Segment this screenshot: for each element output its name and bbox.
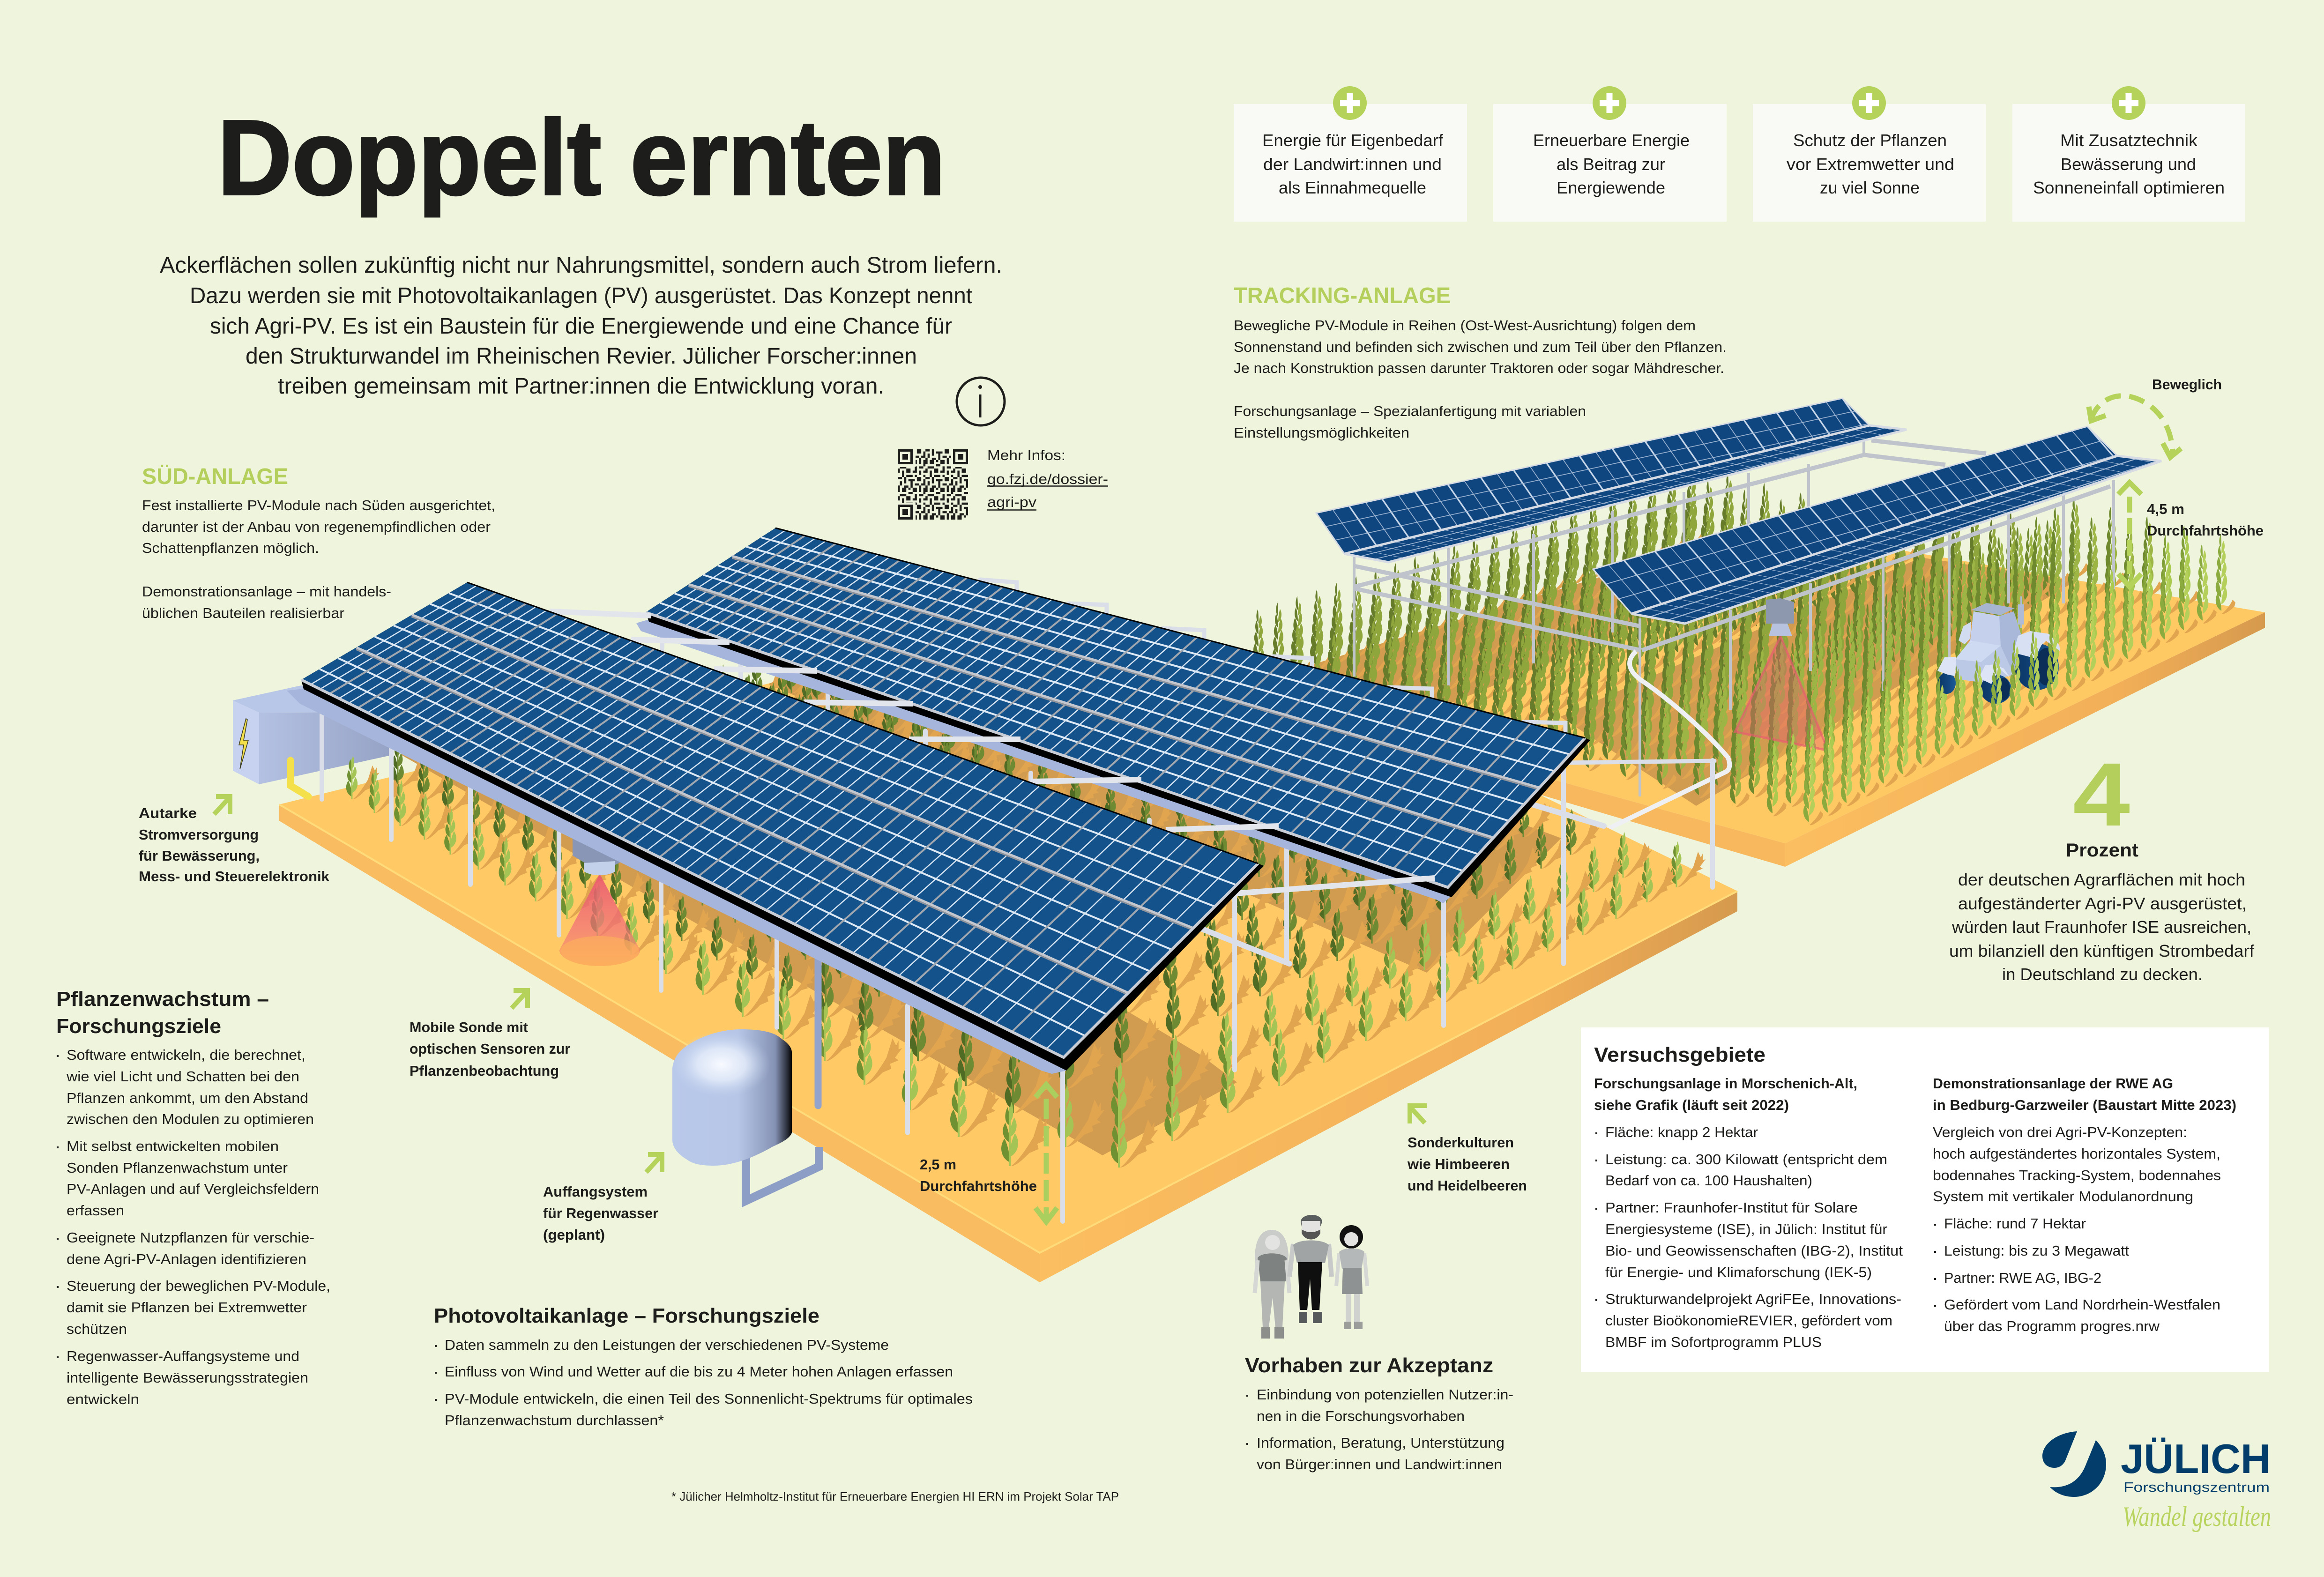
arrow: mobile probe pointer: [512, 990, 528, 1008]
footnote: * Jülicher Helmholtz-Institut für Erneuerbare Energien HI ERN im Projekt Solar TAP: [671, 1489, 1119, 1503]
logo: Forschungszentrum Jülich: Forschungszentrum: [2123, 1480, 2270, 1495]
plants: tracking second row: [1767, 525, 2199, 816]
text block: Photovoltaik research goals: Daten sammeln zu den Leistungen der verschiedenen PV-Systeme: [445, 1337, 889, 1353]
illustration: south system: [233, 466, 1737, 1282]
sensor: mobile probe with beam: [559, 836, 640, 966]
frame: tracking row 2 supports: [1640, 480, 2114, 796]
text block: Pflanzenwachstum research goals: damit sie Pflanzen bei Extremwetter: [67, 1299, 307, 1316]
label: 2,5 m clearance: Durchfahrtshöhe: [920, 1178, 1037, 1194]
text: Tracking-Anlage description: Einstellungsmöglichkeiten: [1234, 424, 1409, 441]
text: more info link: agri-pv: [987, 494, 1037, 510]
tank: rainwater storage: [672, 1029, 792, 1166]
label: Sonderkulturen: Sonderkulturen: [1408, 1134, 1514, 1151]
logo: Forschungszentrum Jülich: [2042, 1431, 2271, 1532]
panel: Versuchsgebiete: bodennahes Tracking-System, bodennahes: [1933, 1167, 2221, 1183]
arrow: autarkic supply pointer: [214, 796, 230, 814]
text block: Photovoltaik research goals: Pflanzenwachstum durchlassen*: [445, 1412, 664, 1428]
text: more info link: go.fzj.de/dossier-: [987, 471, 1108, 487]
panel: Versuchsgebiete: [1581, 1027, 2269, 1372]
arrow: movable panel rotation: [2089, 396, 2181, 457]
label: Autarke Stromversorgung: für Bewässerung,: [139, 848, 260, 864]
stat: 4 percent: der deutschen Agrarflächen mit hoch: [1958, 870, 2245, 889]
text block: Pflanzenwachstum research goals: Geeignete Nutzpflanzen für verschie-: [67, 1229, 314, 1246]
panel: benefit card plant protection: Schutz der Pflanzen: [1793, 131, 1947, 150]
text: Süd-Anlage description: üblichen Bauteilen realisierbar: [142, 605, 344, 621]
text block: Pflanzenwachstum research goals: entwickeln: [67, 1391, 139, 1407]
plate: south ground: [279, 609, 1737, 1282]
panel: Versuchsgebiete: Partner: RWE AG, IBG-2: [1944, 1270, 2101, 1286]
icon: QR code: [897, 448, 969, 521]
arrow: 2.5 m clearance: [1035, 1085, 1057, 1222]
stat: 4 percent: um bilanziell den künftigen Strombedarf: [1949, 941, 2255, 960]
panel: benefit card energy needs: [1234, 86, 1467, 222]
text block: Pflanzenwachstum research goals: Sonden Pflanzenwachstum unter: [67, 1160, 288, 1176]
panel: Versuchsgebiete: Demonstrationsanlage der RWE AG: [1933, 1075, 2173, 1092]
plants: tracking front row: [1803, 534, 2235, 825]
label: Auffangsystem: [543, 1183, 658, 1243]
text: more info link: [987, 447, 1108, 510]
plate: tracking ground: [1228, 527, 2265, 867]
text block: Vorhaben zur Akzeptanz: von Bürger:innen und Landwirt:innen: [1257, 1456, 1502, 1473]
panel: Versuchsgebiete: über das Programm progres.nrw: [1944, 1318, 2160, 1334]
label: Mobile Sonde: Pflanzenbeobachtung: [410, 1063, 559, 1079]
panel: benefit card energy needs: als Einnahmequelle: [1279, 178, 1426, 197]
panel: benefit card renewable energy: [1493, 86, 1727, 222]
text: more info link: Mehr Infos:: [987, 447, 1065, 463]
text block: Pflanzenwachstum research goals: wie viel Licht und Schatten bei den: [66, 1068, 299, 1085]
label: Mobile Sonde: optischen Sensoren zur: [410, 1041, 570, 1057]
text block: Vorhaben zur Akzeptanz: Einbindung von potenziellen Nutzer:in-: [1257, 1386, 1513, 1403]
arrow: 4.5 m clearance: [2118, 483, 2141, 587]
panel: Versuchsgebiete: Vergleich von drei Agri-PV-Konzepten:: [1933, 1124, 2187, 1140]
panel: Versuchsgebiete: cluster BioökonomieREVIER, gefördert vom: [1605, 1312, 1892, 1329]
panel: benefit card extra technology: Bewässerung und: [2061, 155, 2196, 174]
text: Tracking-Anlage description: [1234, 317, 1727, 441]
text block: Photovoltaik research goals: [434, 1304, 973, 1428]
panel: tracking row 1 modules: [1316, 398, 1907, 562]
stat: 4 percent: Prozent: [2066, 840, 2138, 861]
panel: benefit card renewable energy: als Beitrag zur: [1557, 155, 1665, 174]
text block: Pflanzenwachstum research goals: Software entwickeln, die berechnet,: [67, 1047, 305, 1063]
intro text: den Strukturwandel im Rheinischen Revier. Jülicher Forscher:innen: [246, 344, 917, 369]
arrow: special crops pointer: [1410, 1106, 1427, 1123]
panel: benefit card extra technology: Mit Zusatztechnik: [2060, 131, 2198, 150]
text block: Pflanzenwachstum research goals: intelligente Bewässerungsstrategien: [67, 1369, 308, 1386]
text block: Pflanzenwachstum research goals: Forschungsziele: [56, 1015, 221, 1038]
heading: Süd-Anlage: SÜD-ANLAGE: [142, 464, 288, 489]
label: 2,5 m clearance: 2,5 m: [920, 1156, 956, 1173]
text block: Pflanzenwachstum research goals: Pflanzenwachstum –: [56, 988, 269, 1011]
text: Süd-Anlage description: [142, 497, 495, 621]
stat: 4 percent: 4: [2073, 744, 2130, 845]
text: Tracking-Anlage description: Je nach Konstruktion passen darunter Traktoren oder sogar Mähdrescher.: [1234, 360, 1724, 376]
cable: tracking power line: [1065, 651, 1729, 1064]
panel: benefit card extra technology: [2012, 86, 2245, 222]
panel: Versuchsgebiete: Gefördert vom Land Nordrhein-Westfalen: [1944, 1296, 2220, 1313]
stat: 4 percent: [1949, 744, 2255, 984]
plants: tracking middle rows: [1620, 498, 2162, 807]
text block: Pflanzenwachstum research goals: PV-Anlagen und auf Vergleichsfeldern: [67, 1181, 319, 1197]
panel: Versuchsgebiete: Energiesysteme (ISE), in Jülich: Institut für: [1605, 1221, 1887, 1237]
label: Auffangsystem: für Regenwasser: [543, 1205, 658, 1221]
box: autonomous power supply: [233, 685, 389, 796]
label: Autarke Stromversorgung: Mess- und Steuerelektronik: [139, 868, 330, 885]
plants: south crop lattice: [392, 466, 1600, 1136]
panel: benefit card energy needs: Energie für Eigenbedarf: [1262, 131, 1444, 150]
text block: Pflanzenwachstum research goals: dene Agri-PV-Anlagen identifizieren: [67, 1251, 306, 1267]
text block: Photovoltaik research goals: PV-Module entwickeln, die einen Teil des Sonnenlicht-Spektrums für optimales: [445, 1391, 973, 1407]
sensor: tracking probe: [1766, 598, 1794, 636]
label: Auffangsystem: Auffangsystem: [543, 1183, 648, 1200]
struts: panel connectors: [550, 611, 1435, 893]
label: Sonderkulturen: und Heidelbeeren: [1408, 1177, 1527, 1194]
panel: benefit card extra technology: Sonneneinfall optimieren: [2033, 178, 2225, 197]
illustration: tracking system: [1065, 398, 2265, 1064]
intro text: [160, 253, 1002, 399]
panel: benefit card renewable energy: Erneuerbare Energie: [1533, 131, 1690, 150]
heading: Tracking-Anlage: TRACKING-ANLAGE: [1234, 283, 1451, 308]
text block: Photovoltaik research goals: Photovoltaikanlage – Forschungsziele: [434, 1304, 819, 1327]
panel: Versuchsgebiete: Fläche: knapp 2 Hektar: [1605, 1124, 1758, 1140]
panel: Versuchsgebiete: System mit vertikaler Modulanordnung: [1933, 1188, 2193, 1205]
text block: Photovoltaik research goals: Einfluss von Wind und Wetter auf die bis zu 4 Meter hohen Anlagen erfassen: [445, 1363, 953, 1380]
stat: 4 percent: aufgeständerter Agri-PV ausgerüstet,: [1958, 894, 2247, 913]
intro text: treiben gemeinsam mit Partner:innen die Entwicklung voran.: [278, 374, 884, 399]
intro text: sich Agri-PV. Es ist ein Baustein für die Energiewende und eine Chance für: [210, 314, 952, 339]
plants: south front rows: [346, 756, 1706, 1168]
pipes: rainwater drain: [746, 1147, 819, 1201]
panel: rear solar modules: [646, 528, 1590, 897]
text: Tracking-Anlage description: Forschungsanlage – Spezialanfertigung mit variablen: [1234, 403, 1586, 419]
text block: Pflanzenwachstum research goals: [56, 988, 330, 1407]
icon: info: [957, 378, 1005, 425]
text: Tracking-Anlage description: Bewegliche PV-Module in Reihen (Ost-West-Ausrichtung) folgen dem: [1234, 317, 1696, 334]
intro text: Ackerflächen sollen zukünftig nicht nur Nahrungsmittel, sondern auch Strom liefern.: [160, 253, 1002, 278]
label: Autarke Stromversorgung: Stromversorgung: [139, 826, 259, 843]
panel: Versuchsgebiete: hoch aufgeständertes horizontales System,: [1933, 1146, 2220, 1162]
text block: Vorhaben zur Akzeptanz: Vorhaben zur Akzeptanz: [1245, 1354, 1493, 1377]
stat: 4 percent: würden laut Fraunhofer ISE ausreichen,: [1952, 917, 2251, 937]
plants: tracking rear rows: [1253, 465, 2026, 771]
label: 4,5 m clearance: Durchfahrtshöhe: [2147, 522, 2264, 539]
frame: tracking row 1 supports: [1354, 426, 1986, 685]
panel: Versuchsgebiete: Forschungsanlage in Morschenich-Alt,: [1594, 1075, 1857, 1092]
label: Sonderkulturen: [1407, 1134, 1527, 1194]
panel: Versuchsgebiete: Bedarf von ca. 100 Haushalten): [1605, 1172, 1812, 1189]
text block: Vorhaben zur Akzeptanz: Information, Beratung, Unterstützung: [1257, 1435, 1505, 1451]
label: Auffangsystem: (geplant): [543, 1227, 605, 1243]
panel: benefit card plant protection: zu viel Sonne: [1820, 178, 1920, 197]
text block: Pflanzenwachstum research goals: zwischen den Modulen zu optimieren: [67, 1111, 314, 1127]
panel: front solar modules: [301, 582, 1264, 1071]
text block: Vorhaben zur Akzeptanz: nen in die Forschungsvorhaben: [1257, 1408, 1465, 1424]
panel: benefit card renewable energy: Energiewende: [1557, 178, 1665, 197]
logo: Forschungszentrum Jülich: JÜLICH: [2121, 1436, 2271, 1482]
panel: Versuchsgebiete: Leistung: bis zu 3 Megawatt: [1944, 1242, 2129, 1259]
label: Autarke Stromversorgung: Autarke: [139, 805, 197, 821]
panel: tracking row 2 modules: [1593, 426, 2161, 624]
panel: Versuchsgebiete: Strukturwandelprojekt AgriFEe, Innovations-: [1605, 1291, 1901, 1307]
label: Beweglich: Beweglich: [2152, 376, 2222, 393]
stat: 4 percent: in Deutschland zu decken.: [2002, 965, 2203, 984]
text block: Pflanzenwachstum research goals: schützen: [67, 1321, 127, 1337]
panel: Versuchsgebiete: Versuchsgebiete: [1594, 1043, 1765, 1066]
text block: Pflanzenwachstum research goals: erfassen: [67, 1202, 124, 1219]
text block: Pflanzenwachstum research goals: Mit selbst entwickelten mobilen: [67, 1138, 279, 1154]
label: Mobile Sonde: Mobile Sonde mit: [410, 1019, 528, 1035]
panel: Versuchsgebiete: Fläche: rund 7 Hektar: [1944, 1215, 2086, 1232]
text: Süd-Anlage description: darunter ist der Anbau von regenempfindlichen oder: [142, 519, 491, 535]
panel: Versuchsgebiete: Partner: Fraunhofer-Institut für Solare: [1605, 1199, 1858, 1216]
title: Doppelt ernten: [217, 98, 946, 217]
label: 4,5 m clearance: [2147, 501, 2264, 539]
frame: south supports: [322, 580, 1714, 1221]
icon: three people: [1255, 1215, 1367, 1339]
text: Süd-Anlage description: Fest installierte PV-Module nach Süden ausgerichtet,: [142, 497, 495, 513]
panel: Versuchsgebiete: für Energie- und Klimaforschung (IEK-5): [1605, 1264, 1872, 1280]
arrow: rain tank pointer: [646, 1154, 662, 1172]
text block: Pflanzenwachstum research goals: Regenwasser-Auffangsysteme und: [67, 1348, 299, 1364]
label: 4,5 m clearance: 4,5 m: [2147, 501, 2184, 517]
panel: Versuchsgebiete: in Bedburg-Garzweiler (Baustart Mitte 2023): [1933, 1097, 2236, 1113]
text block: Pflanzenwachstum research goals: Pflanzen ankommt, um den Abstand: [67, 1090, 308, 1106]
beam: tracking probe: [1735, 636, 1828, 751]
panel: Versuchsgebiete: Bio- und Geowissenschaften (IBG-2), Institut: [1605, 1242, 1903, 1259]
label: 2,5 m clearance: [920, 1156, 1037, 1194]
intro text: Dazu werden sie mit Photovoltaikanlagen (PV) ausgerüstet. Das Konzept nennt: [190, 283, 972, 308]
panel: benefit card plant protection: [1753, 86, 1986, 222]
label: Mobile Sonde: [410, 1019, 570, 1079]
text block: Vorhaben zur Akzeptanz: [1245, 1354, 1513, 1473]
text block: Pflanzenwachstum research goals: Steuerung der beweglichen PV-Module,: [67, 1278, 330, 1294]
text: Tracking-Anlage description: Sonnenstand und befinden sich zwischen und zum Teil über den Pflanzen.: [1234, 339, 1727, 355]
panel: benefit card energy needs: der Landwirt:innen und: [1263, 155, 1442, 174]
label: Autarke Stromversorgung: [139, 805, 330, 885]
text: Süd-Anlage description: Schattenpflanzen möglich.: [142, 540, 319, 556]
icon: tractor: [1937, 596, 2060, 704]
panel: Versuchsgebiete: siehe Grafik (läuft seit 2022): [1594, 1097, 1789, 1113]
gutter: front panel: [287, 689, 1066, 1074]
panel: Versuchsgebiete: Leistung: ca. 300 Kilowatt (entspricht dem: [1605, 1151, 1887, 1168]
label: Sonderkulturen: wie Himbeeren: [1407, 1156, 1510, 1172]
gutter: rear panel: [636, 619, 1452, 903]
text: Süd-Anlage description: Demonstrationsanlage – mit handels-: [142, 583, 391, 600]
panel: benefit card plant protection: vor Extremwetter und: [1787, 155, 1954, 174]
panel: Versuchsgebiete: BMBF im Sofortprogramm PLUS: [1605, 1334, 1822, 1350]
logo: Forschungszentrum Jülich: Wandel gestalten: [2123, 1501, 2271, 1532]
